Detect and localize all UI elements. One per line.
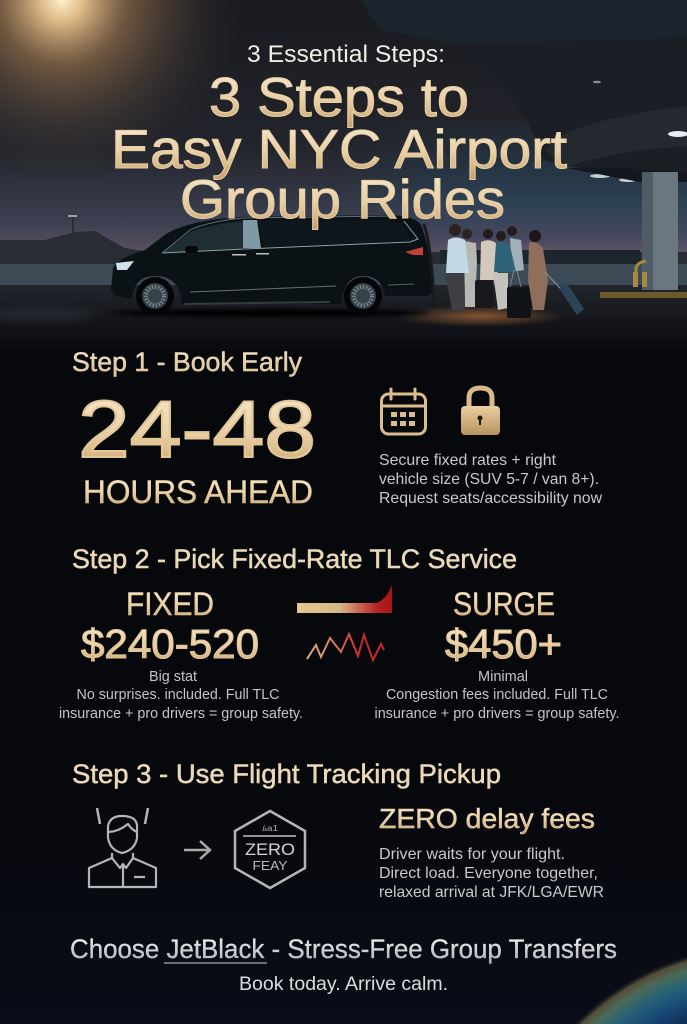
step 2 panel [59,544,620,722]
step 1 description: Secure fixed rates + right [379,452,557,469]
fixed price column [59,586,303,722]
group of travellers with luggage [445,224,584,318]
step 2 heading: Step 2 - Pick Fixed-Rate TLC Service [72,544,517,574]
step 1 description: Request seats/accessibility now [379,490,602,507]
wheels [136,277,174,315]
fixed price column: insurance + pro drivers = group safety. [59,706,303,722]
icon: zero fee badge: ZERO [245,840,295,859]
overhead canopy [360,0,687,182]
step 3 description: Driver waits for your flight. [379,846,565,863]
footer call to action: Book today. Arrive calm. [239,974,448,995]
step 3 heading: Step 3 - Use Flight Tracking Pickup [72,759,501,789]
surge price column: SURGE [453,586,555,622]
barrier wall [0,264,687,287]
fixed price column: $240-520 [81,621,259,667]
main title [111,66,567,230]
footer call to action [70,934,617,995]
surge price column [374,586,620,722]
chart: surge zigzag line [307,634,384,660]
step 3 description: relaxed arrival at JFK/LGA/EWR [379,884,604,901]
footer call to action: Choose JetBlack - Stress-Free Group Transfers [70,934,617,964]
step 3 description [379,846,604,901]
icon: zero fee badge: ﾑa1 [262,824,279,833]
arrow [184,841,210,859]
skyline [0,231,687,272]
surge price column: insurance + pro drivers = group safety. [374,706,620,722]
step 1 panel [72,347,602,510]
decorative rainbow arc bottom right [560,945,687,1024]
step 1 description: vehicle size (SUV 5-7 / van 8+). [379,471,599,488]
pillar [642,172,678,290]
van [110,215,434,317]
icon: calendar [382,389,426,434]
icon: zero fee badge [235,811,305,888]
step 3 panel [72,759,604,901]
sunlight glow [0,0,250,190]
main title: Group Rides [180,168,505,230]
icon: stressed traveller [89,808,156,887]
big stat: 24-48 hours ahead: HOURS AHEAD [83,474,313,510]
step 1 heading: Step 1 - Book Early [72,347,302,377]
bottom navy tint [0,780,687,1024]
surge price column: $450+ [445,621,562,667]
icon: zero fee badge: FEAY [252,859,288,873]
hero photo: van and group at airport [0,0,687,355]
step 1 description [379,452,602,507]
fixed price column: FIXED [126,586,214,622]
main title: Easy NYC Airport [111,118,567,180]
big stat: 24-48 hours ahead: 24-48 [78,385,316,475]
fixed price column: No surprises. included. Full TLC [76,687,280,703]
step 3 description: Direct load. Everyone together, [379,865,598,882]
chart: flat fixed rate bar rising to red [297,585,392,613]
icon: padlock [461,388,500,435]
zero delay fees stat: ZERO delay fees [379,803,595,834]
ground [0,285,687,355]
eyebrow: 3 Essential Steps: 3 Essential Steps: [247,41,445,68]
surge price column: Minimal [478,669,528,685]
fixed price column: Big stat [149,669,197,685]
big stat: 24-48 hours ahead [78,385,316,510]
surge price column: Congestion fees included. Full TLC [386,687,608,703]
main title: 3 Steps to [209,66,469,128]
